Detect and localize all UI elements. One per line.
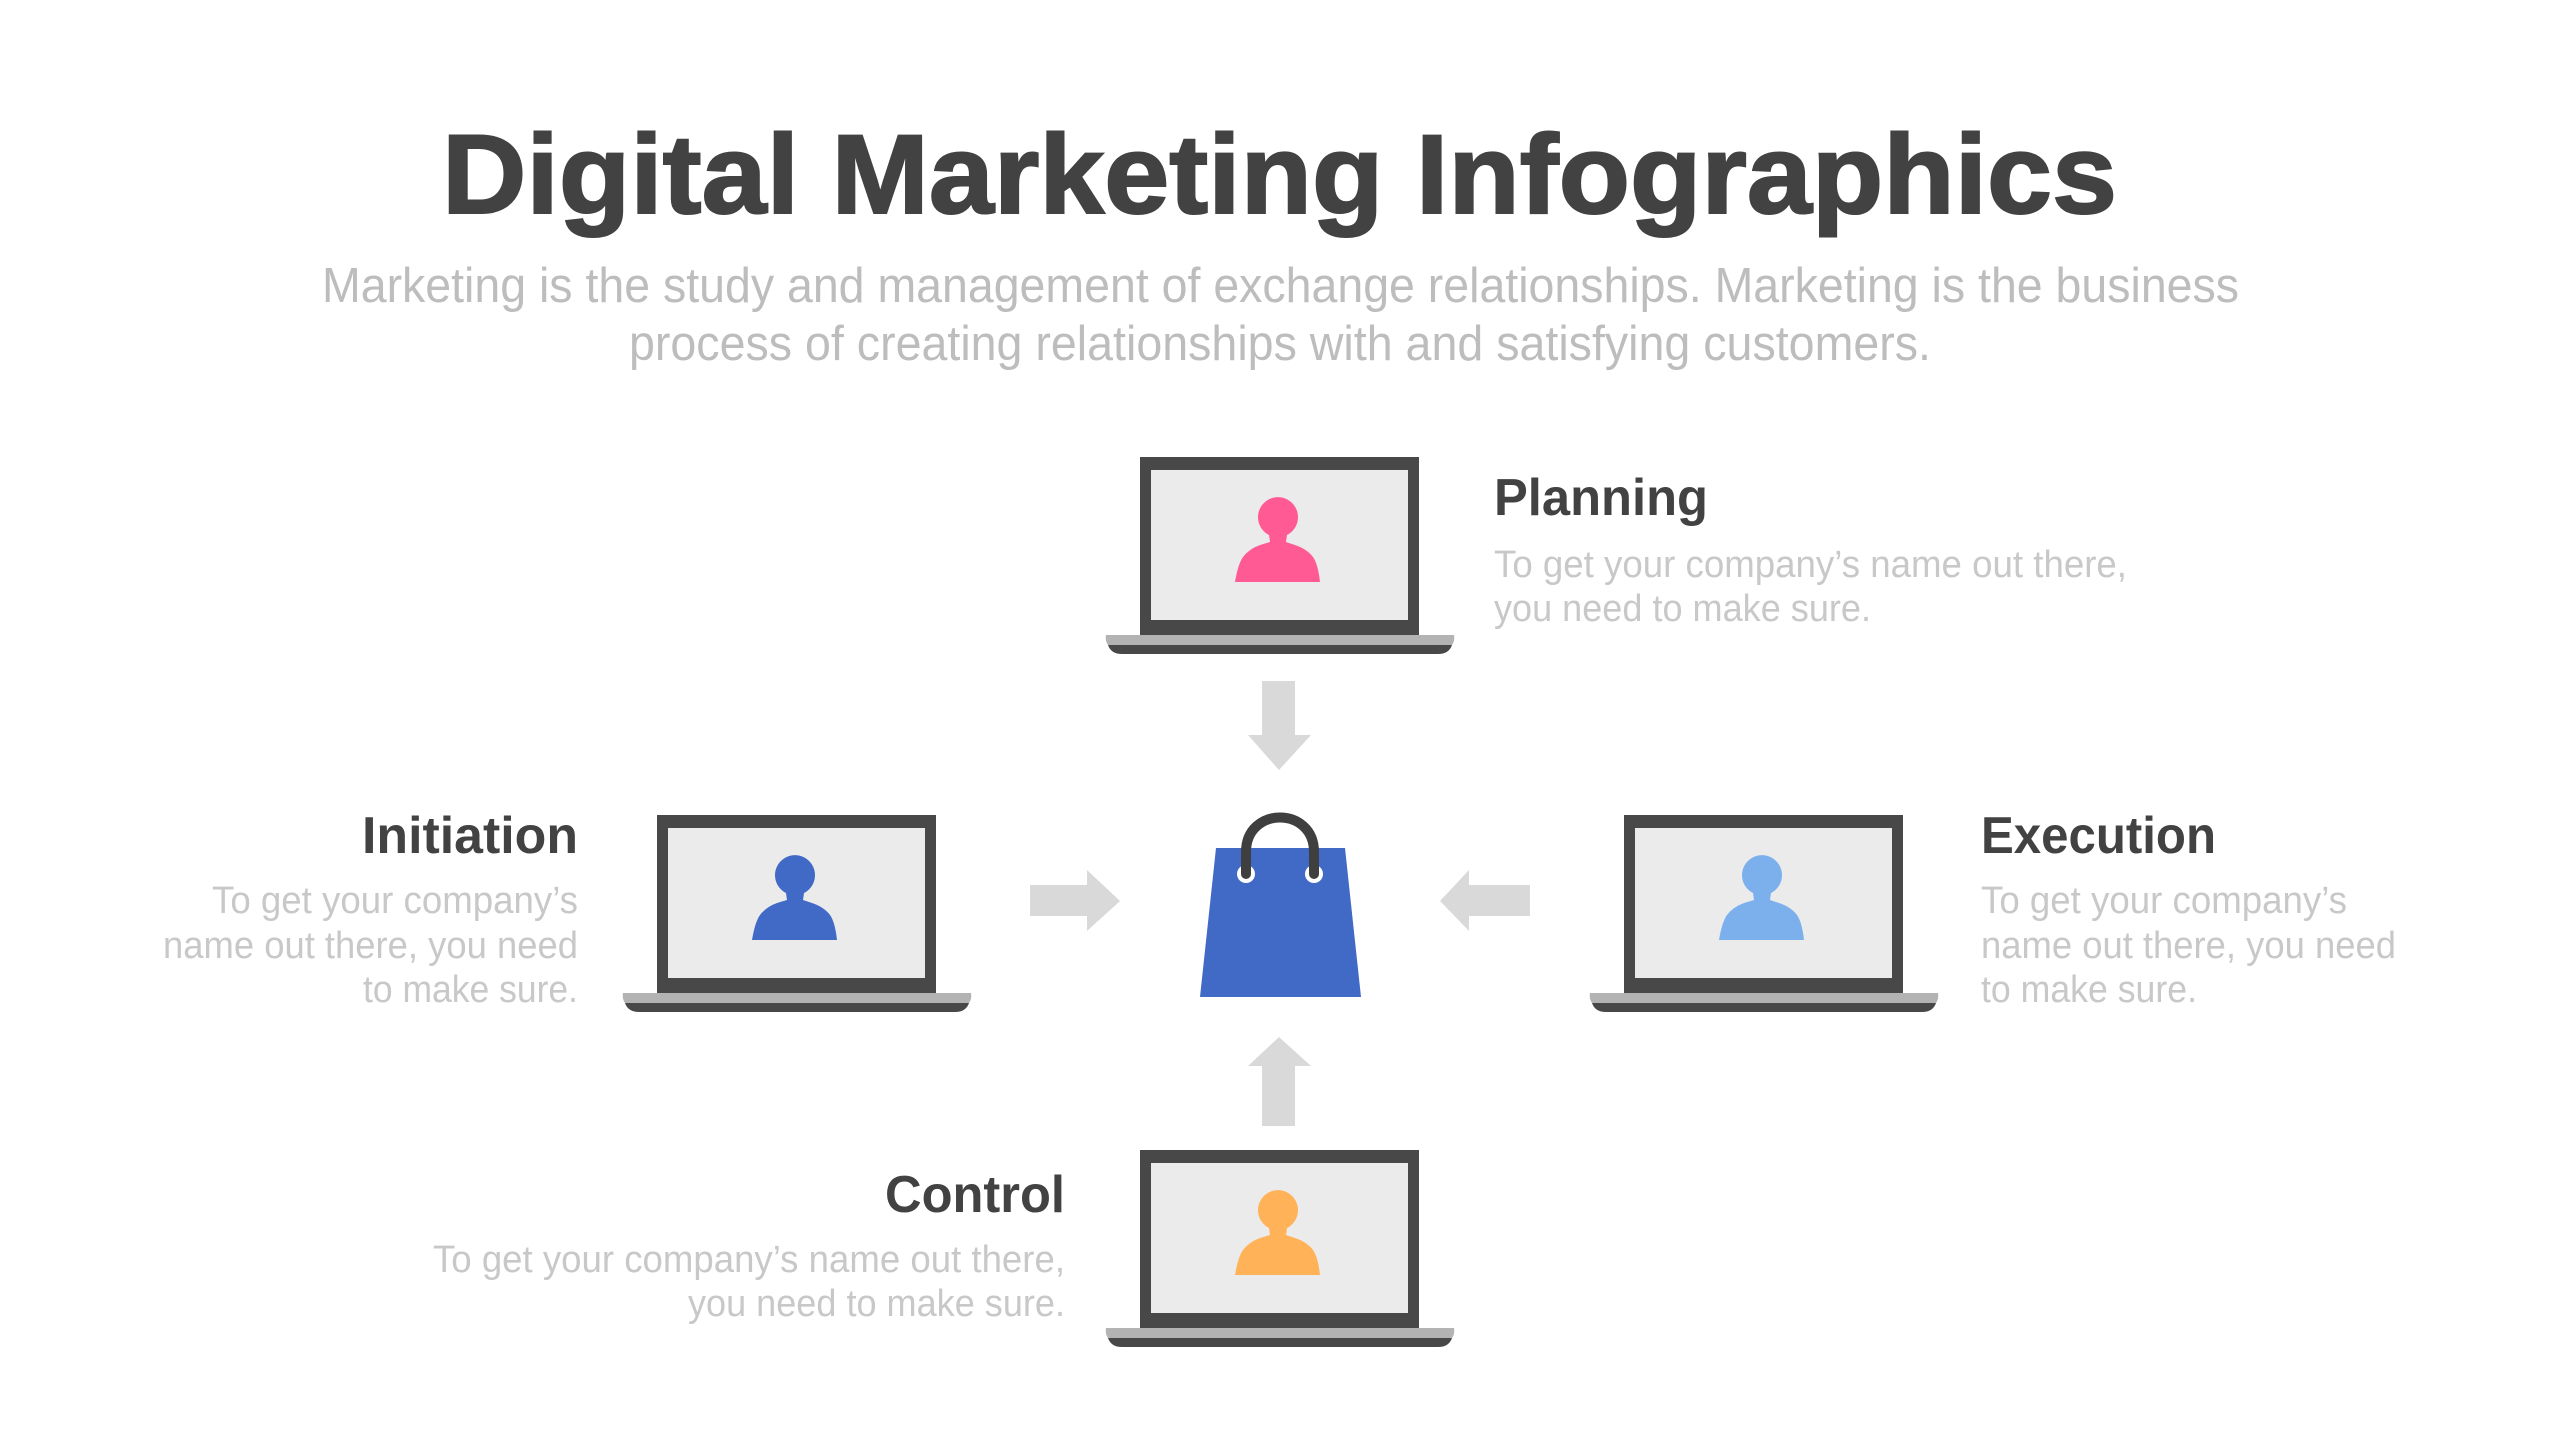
arrow: initiation to bag [1030,870,1120,931]
text: initiation description [163,880,578,1011]
icon: planning laptop [1106,457,1454,654]
text: control description: To get your company’s name out there, [433,1239,1065,1281]
panel: control [433,1150,1454,1347]
icon: execution laptop [1590,815,1938,1012]
text: planning description: To get your company’s name out there, [1494,544,2127,586]
panel: initiation [163,807,971,1012]
icon: control laptop [1106,1150,1454,1347]
heading: execution: Execution [1981,807,2216,865]
icon: shopping bag [1200,818,1361,997]
text: planning description [1494,544,2127,630]
subtitle: Marketing is the study and management of exchange relationships. Marketing is the business [322,259,2239,313]
heading: planning: Planning [1494,469,1708,527]
title: Digital Marketing Infographics [442,112,2117,237]
text: initiation description: To get your company’s [212,880,578,922]
subtitle: process of creating relationships with and satisfying customers. [629,317,1931,371]
text: execution description [1981,880,2396,1011]
icon: initiation laptop [623,815,971,1012]
heading: initiation: Initiation [362,807,578,865]
arrow: planning to bag [1248,681,1311,770]
text: control description: you need to make sure. [688,1283,1065,1325]
text: execution description: name out there, you need [1981,925,2396,967]
panel: execution [1590,807,2396,1012]
text: initiation description: name out there, you need [163,925,578,967]
arrow: execution to bag [1440,870,1530,931]
subtitle [322,259,2239,371]
arrow: control to bag [1248,1037,1311,1126]
text: control description [433,1239,1065,1325]
text: execution description: to make sure. [1981,969,2197,1011]
heading: control: Control [885,1166,1065,1224]
text: execution description: To get your company’s [1981,880,2347,922]
panel: planning [1106,457,2127,654]
text: planning description: you need to make sure. [1494,588,1871,630]
text: initiation description: to make sure. [363,969,578,1011]
